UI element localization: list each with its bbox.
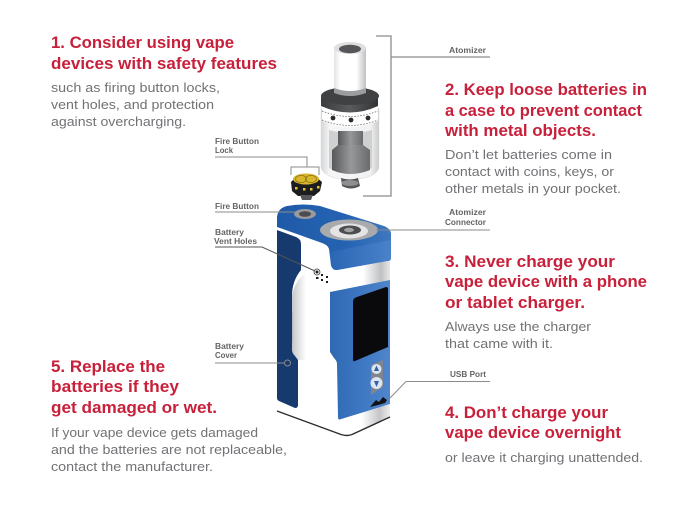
leader lines: [215, 36, 490, 398]
text 4: or leave it charging unattended.: [445, 451, 643, 465]
leader: atomizer bracket: [363, 36, 490, 196]
step 5: replace batteries: [51, 358, 287, 474]
vent holes: [314, 269, 328, 283]
label: atomizer connector: Connector: [445, 218, 486, 227]
leader: battery cover: [215, 360, 290, 366]
heading 1: [51, 34, 277, 73]
heading 2: [444, 81, 647, 140]
heading 4: 4. Don’t charge your: [445, 404, 609, 422]
heading 5: 5. Replace the: [51, 358, 165, 376]
step 1: safety features: [51, 34, 277, 129]
heading 3: vape device with a phone: [445, 273, 647, 291]
label: fire button: Fire Button: [215, 202, 259, 211]
label: battery cover: [215, 342, 245, 360]
text 5: and the batteries are not replaceable,: [51, 443, 287, 457]
text 1: such as firing button locks,: [51, 81, 220, 95]
step 3: charger: [445, 253, 647, 351]
text 5: If your vape device gets damaged: [51, 426, 258, 440]
label: atomizer: Atomizer: [449, 46, 486, 55]
icon: fire button lock: [291, 174, 322, 200]
text 5: [51, 426, 287, 474]
text 1: vent holes, and protection: [51, 98, 214, 112]
control buttons: [370, 360, 383, 395]
label: vent holes: [214, 228, 258, 246]
text 2: other metals in your pocket.: [445, 182, 621, 196]
label: vent holes: Vent Holes: [214, 237, 258, 246]
text 3: that came with it.: [445, 337, 553, 351]
leader: fire button lock: [215, 157, 319, 175]
cap front face: [330, 240, 391, 270]
heading 2: 2. Keep loose batteries in: [445, 81, 647, 99]
text 1: against overcharging.: [51, 115, 186, 129]
text 3: Always use the charger: [445, 320, 591, 334]
leader: fire button: [215, 211, 296, 213]
heading 5: [51, 358, 217, 417]
label: fire button lock: [215, 137, 259, 155]
side blue panel: [330, 280, 390, 420]
label: battery cover: Battery: [215, 342, 245, 351]
text 3: [445, 320, 591, 351]
screen: [353, 287, 388, 361]
heading 3: [445, 253, 647, 312]
text 2: [445, 148, 621, 196]
leader: vent holes: [215, 247, 315, 271]
heading 4: vape device overnight: [445, 424, 621, 442]
text 5: contact the manufacturer.: [51, 460, 213, 474]
step 4: overnight: [445, 404, 643, 465]
white band: [330, 232, 390, 293]
leader: USB port: [390, 382, 490, 398]
text 2: Don’t let batteries come in: [445, 148, 612, 162]
fire button: [294, 209, 316, 219]
bottom edge: [277, 411, 390, 436]
heading 2: with metal objects.: [444, 122, 596, 140]
heading 5: batteries if they: [51, 378, 180, 396]
label: fire button lock: Lock: [215, 146, 234, 155]
label: battery cover: Cover: [215, 351, 237, 360]
illustration: atomizer: [321, 42, 379, 188]
text 1: [51, 81, 220, 129]
label: vent holes: Battery: [215, 228, 245, 237]
heading 1: 1. Consider using vape: [51, 34, 234, 52]
lower white foot: [338, 404, 390, 435]
heading 3: or tablet charger.: [445, 294, 585, 312]
label: atomizer connector: Atomizer: [449, 208, 486, 217]
text 2: contact with coins, keys, or: [445, 165, 614, 179]
atomizer connector: [320, 220, 378, 240]
heading 4: [445, 404, 621, 442]
white body: [277, 226, 390, 436]
step 2: loose batteries: [444, 81, 647, 196]
label: fire button lock: Fire Button: [215, 137, 259, 146]
battery cover: [277, 230, 301, 408]
label: USB port: USB Port: [450, 370, 486, 379]
heading 5: get damaged or wet.: [51, 399, 217, 417]
grey shading: [292, 272, 312, 360]
heading 3: 3. Never charge your: [445, 253, 616, 271]
top cap: [277, 204, 391, 270]
USB port: [370, 397, 387, 407]
leader: atomizer connector: [376, 229, 490, 231]
heading 2: a case to prevent contact: [445, 102, 642, 120]
heading 1: devices with safety features: [51, 55, 277, 73]
label: atomizer connector: [445, 208, 486, 227]
part labels: [214, 46, 486, 379]
illustration: vape device body: [277, 204, 391, 436]
